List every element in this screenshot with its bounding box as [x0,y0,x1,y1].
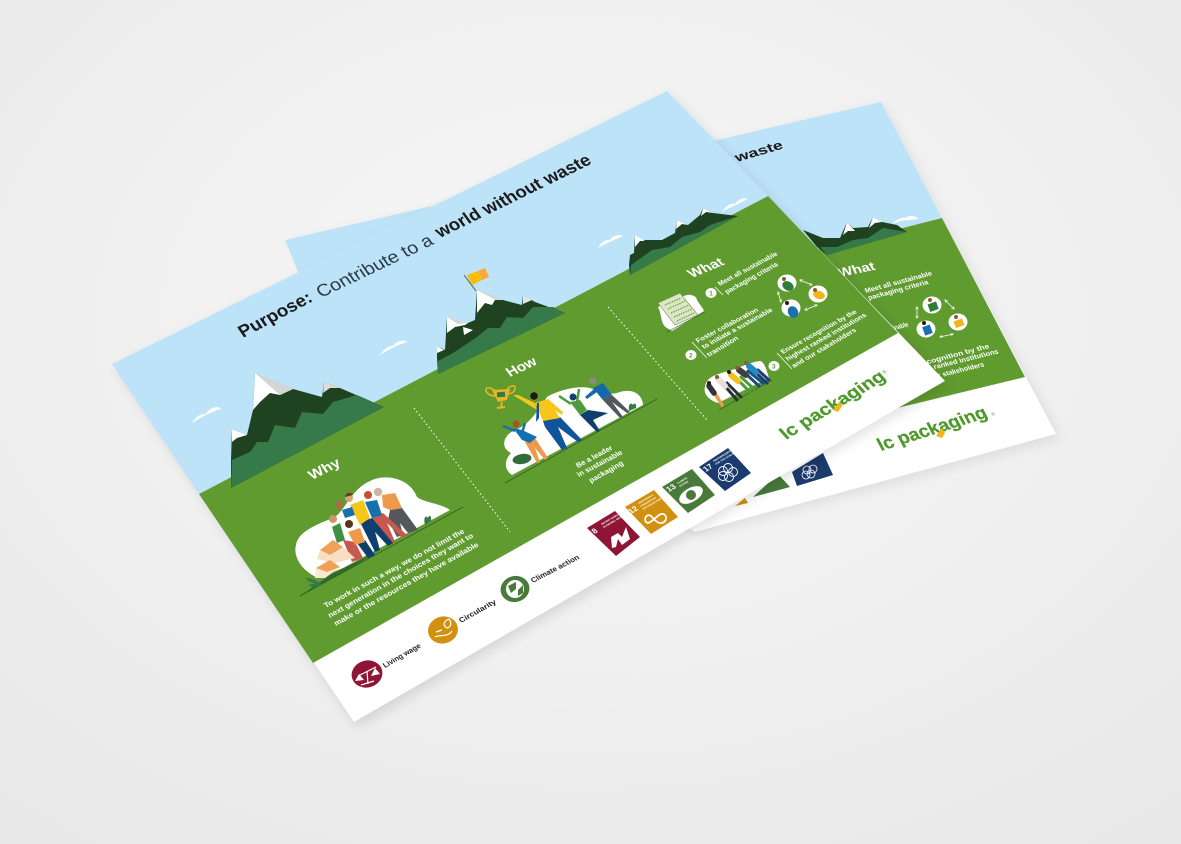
item 3: and our stakeholders [791,327,858,369]
item 3: 3 [772,364,776,370]
item 3: highest ranked institutions [785,312,869,362]
SDG 12 tile: CONSUMPTION [640,497,657,508]
heading: What: What [684,254,728,280]
SDG 8 tile: ECONOMIC GROWTH [602,512,628,529]
back SDG squares [735,453,833,506]
back text blocks: and our stakeholders [915,362,986,385]
heading: Why: Why [305,454,343,482]
illustration: criteria checklist [658,293,705,332]
why text: next generation in the choices they want to [326,531,476,620]
how text: in sustainable [575,448,624,479]
SDG 12 tile: RESPONSIBLE [638,494,655,505]
illustration: team with trophy [486,378,657,483]
why text: To work in such a way, we do not limit the [322,527,466,610]
item 2: Foster collaboration [695,307,760,345]
back sheet [285,102,1060,536]
SDG 17 tile [699,448,751,491]
item 1: packaging criteria [724,262,780,296]
woman on left [503,420,548,463]
how text [574,444,626,485]
back logo: lc packaging [873,402,991,454]
SDG 8 tile: DECENT WORK AND [600,510,625,526]
item 2: to initiate a sustainable [701,307,775,351]
title: Purpose: [234,288,316,341]
item 2: 2 [689,352,693,360]
clouds [192,198,747,423]
back What heading: What [835,259,878,280]
old man [374,488,418,537]
back text blocks: highest ranked institutions [905,349,1000,378]
item 1: 1 [709,290,713,298]
dotted dividers [414,307,707,532]
trophy [486,386,515,408]
legend: circularity [425,597,499,647]
woman in blue [364,491,407,543]
leaf [512,452,532,466]
man with trophy [513,392,582,450]
why text: make or the resources they have available [332,540,480,628]
item 1 [706,251,780,298]
how text: Be a leader [574,444,615,470]
back text blocks: recognition by the [918,343,991,368]
girl and red skirt [343,520,375,562]
plant [424,516,431,525]
front sheet shadow [116,95,949,727]
SDG 17 tile: FOR THE GOALS [714,452,735,466]
man in blue [585,378,630,418]
back text blocks: Meet all sustainable [864,271,934,295]
illustration: family group [295,477,463,596]
jumping woman [559,389,608,432]
front sheet [112,91,945,722]
SDG 8 tile [587,510,640,556]
legend: climate action [498,553,582,605]
back cloud [892,216,918,224]
front logo: ® [881,368,889,375]
title: Contribute to a [312,231,437,301]
heading: How: How [502,354,540,379]
plant [629,404,636,411]
back title: waste [731,137,785,165]
left mountains [231,373,384,488]
boxes [315,540,355,578]
carried child [335,501,355,518]
what list [686,251,869,371]
illustration: partners shaking hands [705,361,772,410]
sky [112,91,768,494]
legend: climate action: Climate action [529,553,582,585]
item 2: transition [706,335,740,359]
illustration: collaboration cycle [778,274,828,320]
SDG 12 tile [625,490,678,534]
front logo: lc packaging [775,367,889,443]
item 3 [768,309,869,371]
SDG 17 tile: 17 [701,462,715,473]
ground [199,196,898,663]
back mountains [803,217,907,255]
title: world without waste [430,150,595,242]
middle mountains with flag [437,268,565,374]
SDG 13 tile: 13 [664,482,679,493]
item 2 [686,307,775,360]
back logo: ® [990,410,997,418]
back text blocks: packaging criteria [867,279,930,302]
SDG 13 tile: ACTION [678,480,689,488]
legend: circularity: Circularity [457,597,499,625]
SDG 13 tile [662,469,715,513]
SDG 17 tile: PARTNERSHIPS [712,449,732,463]
boy in green [329,515,345,543]
SDG 13 tile: CLIMATE [676,476,689,485]
SDG 8 tile: 8 [590,526,600,535]
item 1: Meet all sustainable [717,251,780,288]
SDG 12 tile: 12 [626,504,641,515]
SDG 12 tile: AND PRODUCTION [642,498,663,511]
legend: living wage [349,641,423,691]
back cycle diagram [916,296,968,338]
legend: living wage: Living wage [381,641,423,670]
back text blocks [864,271,1000,385]
flag [464,268,489,291]
back text blocks: sustainable [878,322,910,336]
item 3: Ensure recognition by the [780,309,859,355]
how text: packaging [587,459,626,485]
title [234,150,595,341]
right mountains [629,208,738,275]
man in yellow [345,493,393,552]
